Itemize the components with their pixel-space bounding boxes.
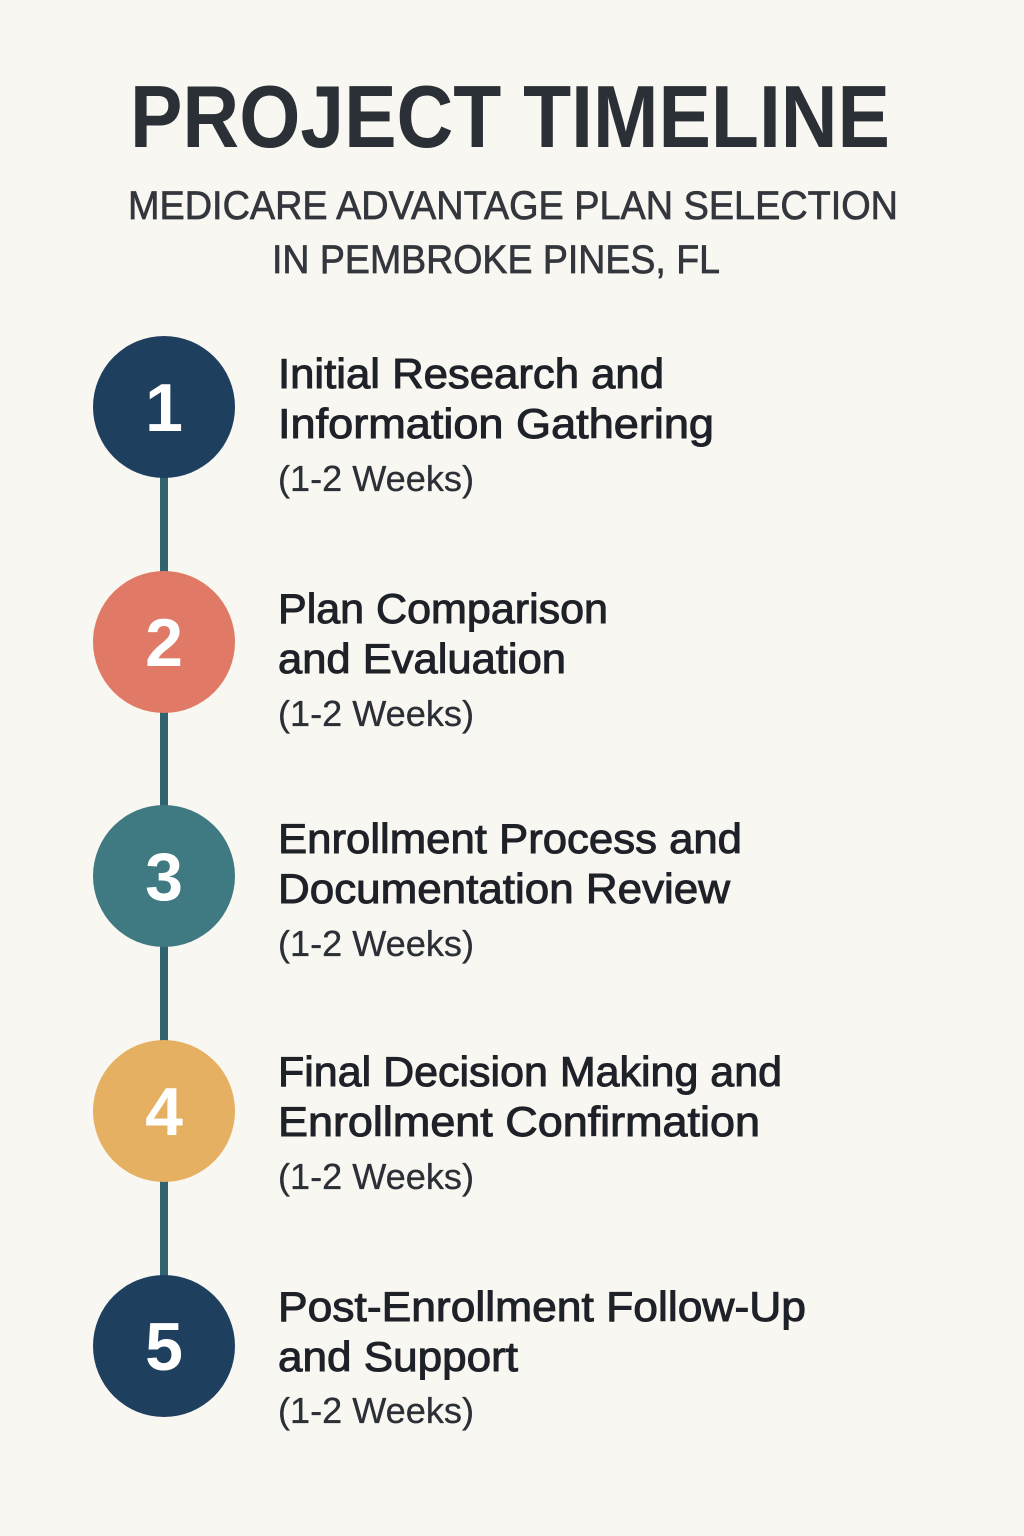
step 5: Post-Enrollment Follow-Up [278,1283,806,1330]
title: PROJECT TIMELINE [130,67,890,166]
subtitle [128,184,898,282]
subtitle: IN PEMBROKE PINES, FL [272,238,720,282]
step 1 [93,336,714,499]
step 5: and Support [278,1333,518,1380]
step 3: Enrollment Process and [278,815,742,862]
step 1: (1-2 Weeks) [278,458,474,499]
step 4 [93,1040,782,1197]
step 2 [93,571,608,734]
step 2: 2 [145,605,183,681]
step 3: (1-2 Weeks) [278,923,474,964]
step 2: (1-2 Weeks) [278,693,474,734]
step 1: Initial Research and [278,350,664,397]
step 4: Enrollment Confirmation [278,1098,760,1145]
step 4: Final Decision Making and [278,1048,782,1095]
step 1: 1 [145,370,183,446]
step 5: 5 [145,1309,183,1385]
step 5: (1-2 Weeks) [278,1390,474,1431]
step 4: (1-2 Weeks) [278,1156,474,1197]
step 3: 3 [145,839,183,915]
subtitle: MEDICARE ADVANTAGE PLAN SELECTION [128,184,898,228]
timeline connector line [160,470,168,1290]
step 2: and Evaluation [278,635,566,682]
step 3: Documentation Review [278,865,731,912]
step 1: Information Gathering [278,400,714,447]
step 5 [93,1275,806,1431]
step 3 [93,805,742,964]
step 4: 4 [145,1074,183,1150]
step 2: Plan Comparison [278,585,608,632]
